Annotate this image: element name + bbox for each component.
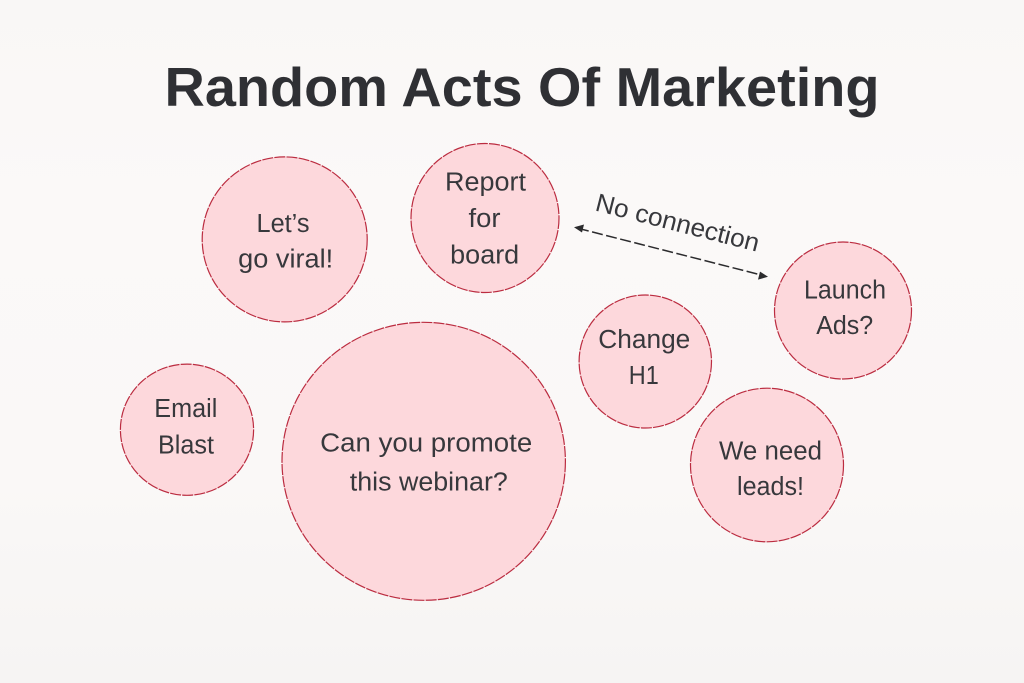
bubble: Report for board <box>411 144 559 292</box>
bubble: We need leads: leads! <box>737 473 804 501</box>
bubble: Launch Ads: Ads? <box>816 312 873 340</box>
bubble: Change H1: Change <box>598 326 690 354</box>
bubble: Report for board: Report <box>445 168 526 196</box>
bubble: Report for board: board <box>450 242 519 270</box>
bubble: Email Blast: Blast <box>158 432 214 460</box>
bubble: Can you promote this webinar <box>282 322 565 600</box>
annotation: no connection: No connection <box>593 189 762 258</box>
bubble: Launch Ads: Launch <box>804 276 886 304</box>
bubble: We need leads <box>690 388 844 542</box>
title: Random Acts Of Marketing <box>164 57 880 118</box>
bubble: Let's go viral: Let’s <box>256 210 310 238</box>
bubble: Change H1: H1 <box>629 362 659 390</box>
bubble: Change H1 <box>579 295 712 428</box>
bubble: Launch Ads <box>774 242 912 379</box>
bubble: Can you promote this webinar: this webinar? <box>350 468 508 496</box>
bubble: Let's go viral: go viral! <box>238 246 333 274</box>
annotation: no connection <box>574 189 768 280</box>
bubble: Let's go viral <box>202 157 367 322</box>
bubble: Email Blast <box>120 364 254 495</box>
bubble: Report for board: for <box>468 205 501 233</box>
bubble: Email Blast: Email <box>154 395 217 423</box>
arrow: dashed double-headed <box>574 224 768 280</box>
bubble: Can you promote this webinar: Can you promote <box>320 430 532 458</box>
bubble: We need leads: We need <box>719 438 822 466</box>
